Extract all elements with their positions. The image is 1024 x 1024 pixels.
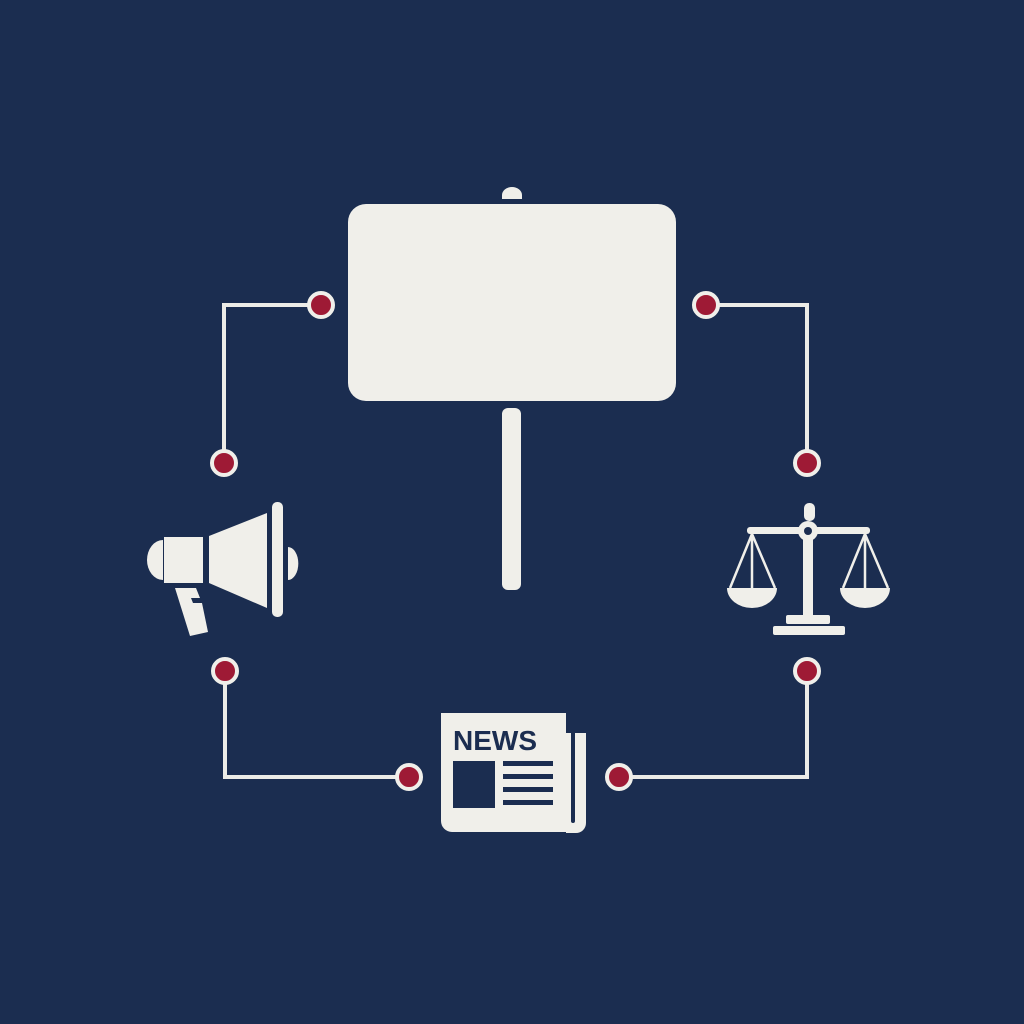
icon: megaphone bbox=[147, 502, 298, 636]
icon: protest sign bbox=[348, 187, 676, 590]
icon: newspaper bbox=[441, 713, 586, 833]
connector lines bbox=[224, 305, 807, 777]
connector nodes bbox=[212, 293, 819, 789]
icon: scales of justice bbox=[727, 503, 890, 635]
icon: newspaper: NEWS bbox=[453, 725, 537, 756]
